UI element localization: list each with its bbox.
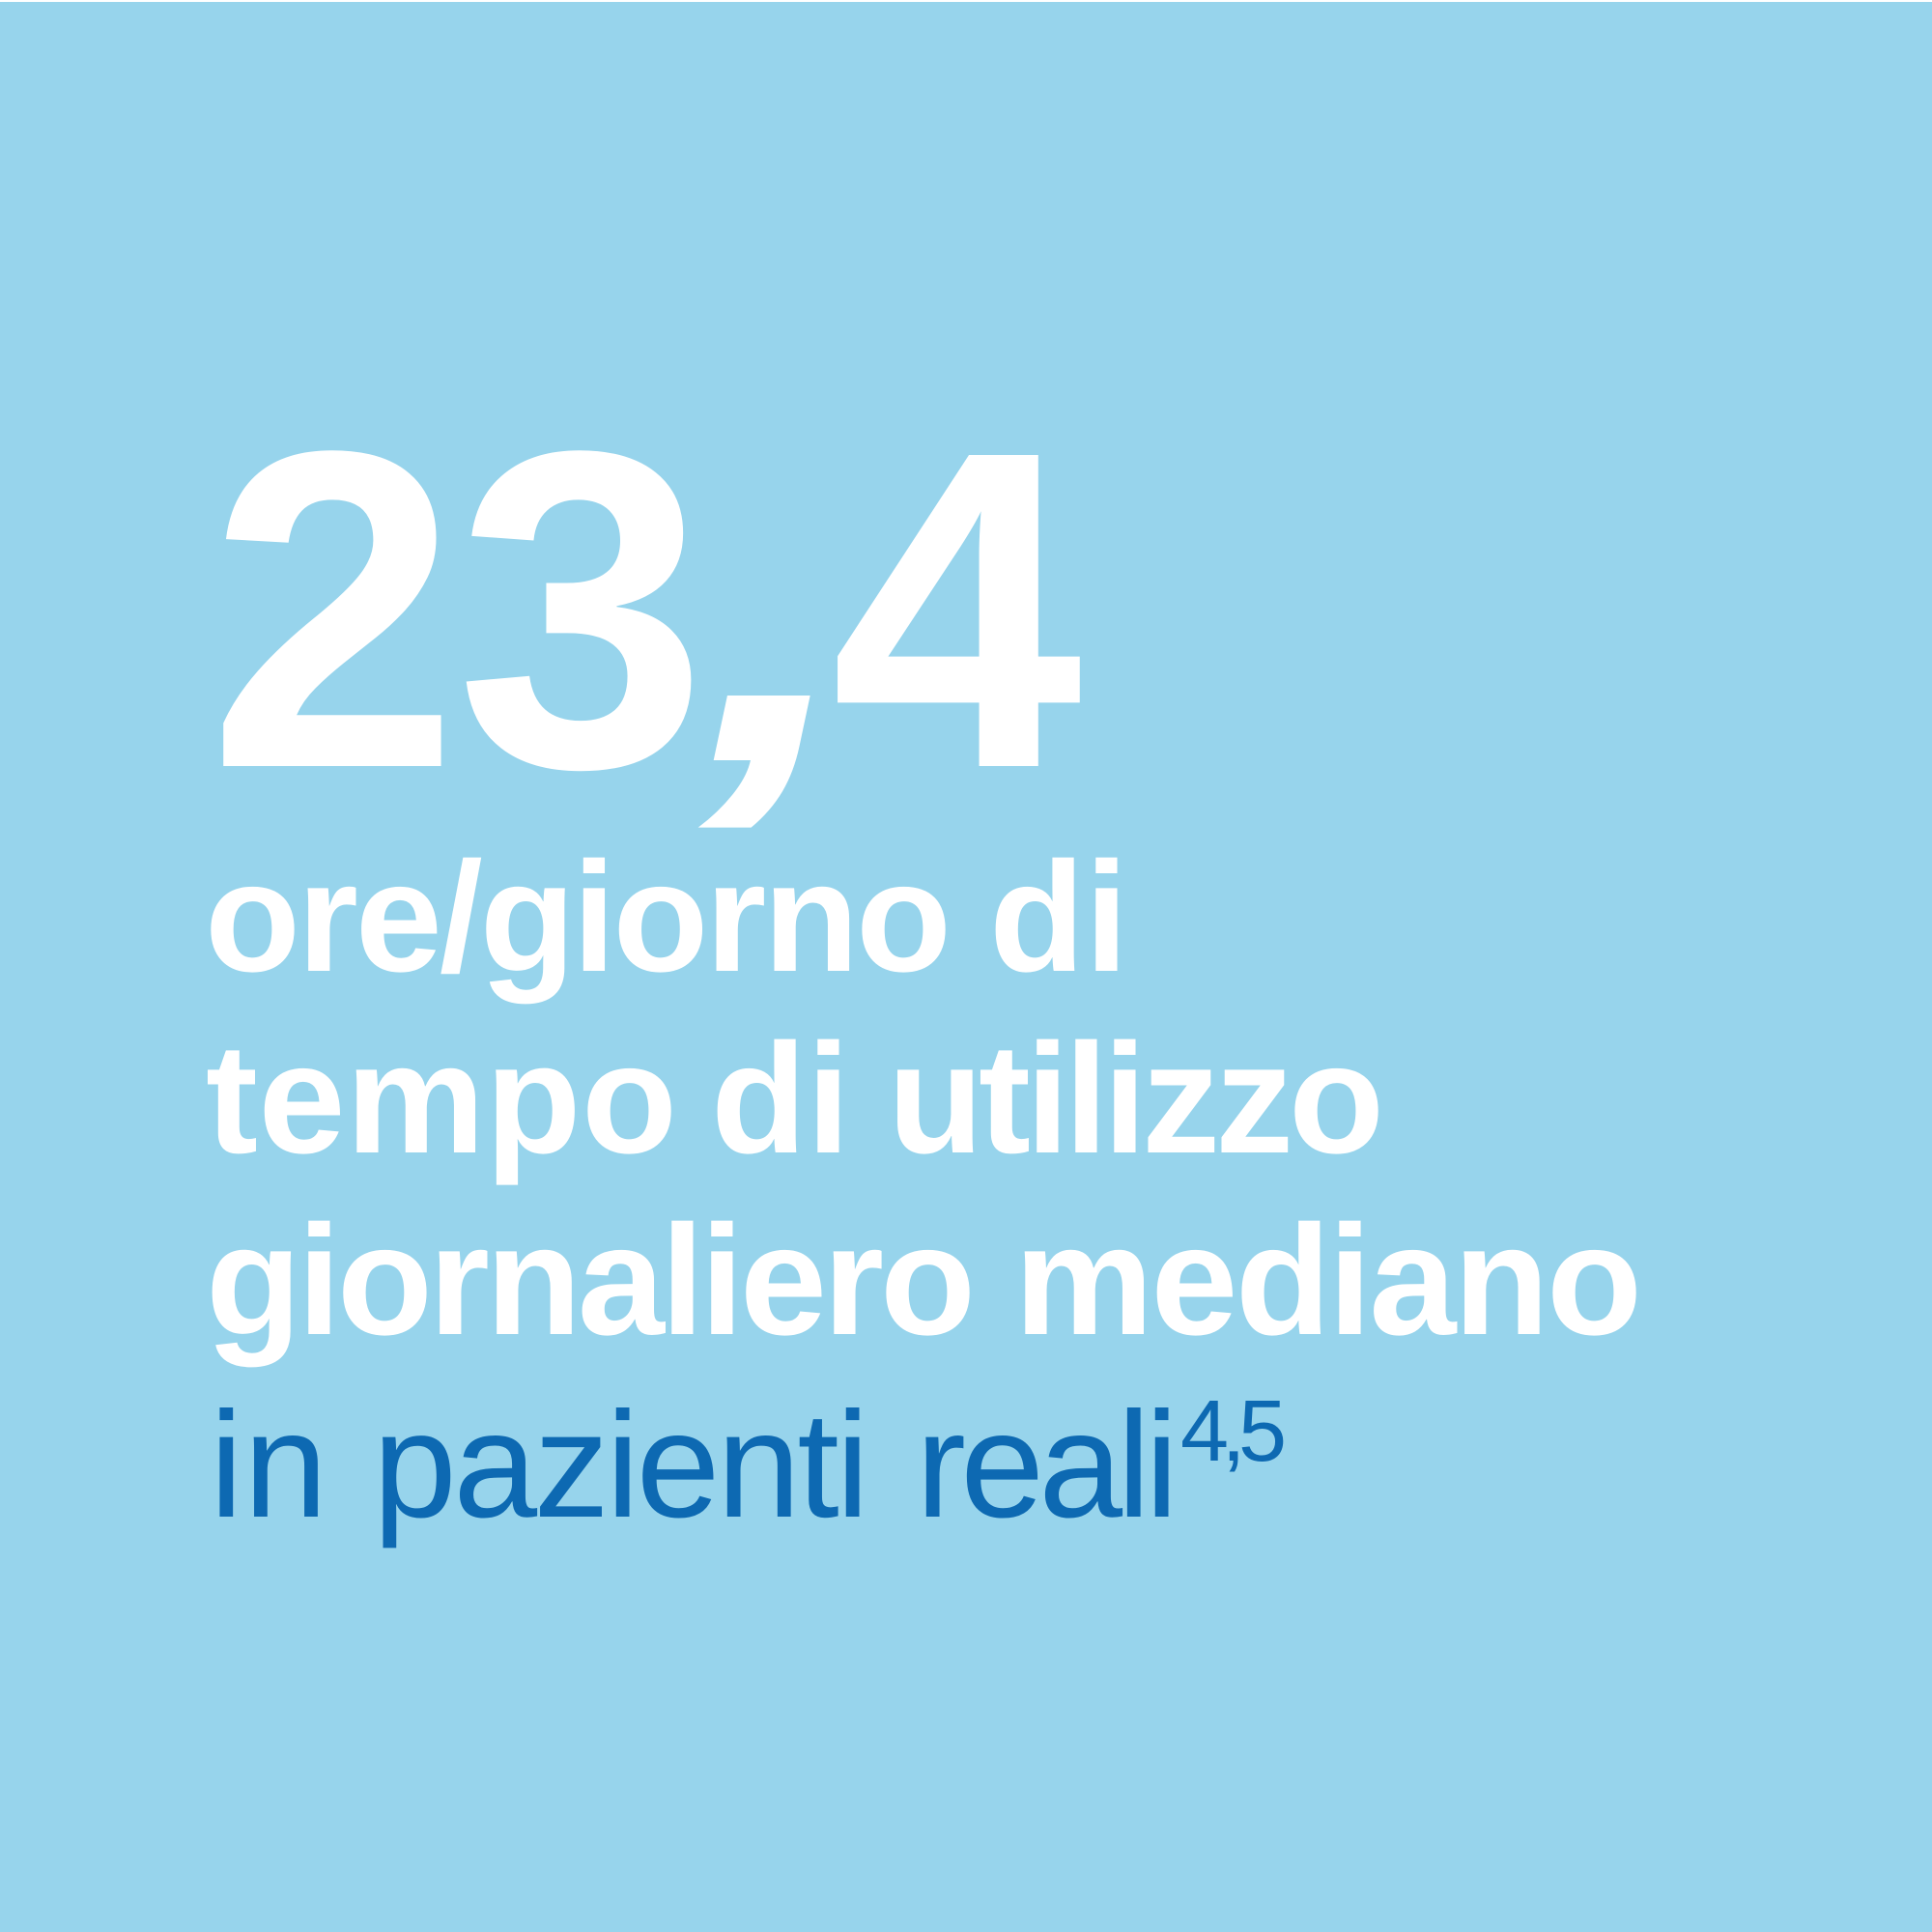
line: giornaliero mediano: giornaliero (206, 1193, 976, 1368)
line: giornaliero mediano: mediano (1014, 1193, 1642, 1368)
line: ore/giorno di: di (989, 830, 1128, 1005)
line: tempo di utilizzo: tempo (206, 1011, 677, 1186)
line: ore/giorno di: ore/giorno (205, 830, 952, 1005)
line: in pazienti reali with reference superscript: 4,5 (1180, 1383, 1287, 1480)
line: in pazienti reali with reference superscript: in (210, 1381, 327, 1549)
line: tempo di utilizzo: di (711, 1011, 850, 1186)
line: in pazienti reali with reference superscript (210, 1381, 1287, 1549)
big number: 23,4: 2 (208, 357, 459, 863)
big number: 23,4: , (653, 367, 920, 853)
line: in pazienti reali with reference superscript: pazienti (373, 1381, 869, 1549)
big number: 23,4: 3 (456, 357, 707, 863)
line: tempo di utilizzo: utilizzo (888, 1011, 1384, 1186)
big number: 23,4 (208, 357, 1085, 863)
big number: 23,4: 4 (831, 357, 1085, 863)
line: tempo di utilizzo (206, 1011, 1384, 1186)
line: giornaliero mediano (206, 1193, 1642, 1368)
line: in pazienti reali with reference superscript: reali (916, 1381, 1179, 1549)
